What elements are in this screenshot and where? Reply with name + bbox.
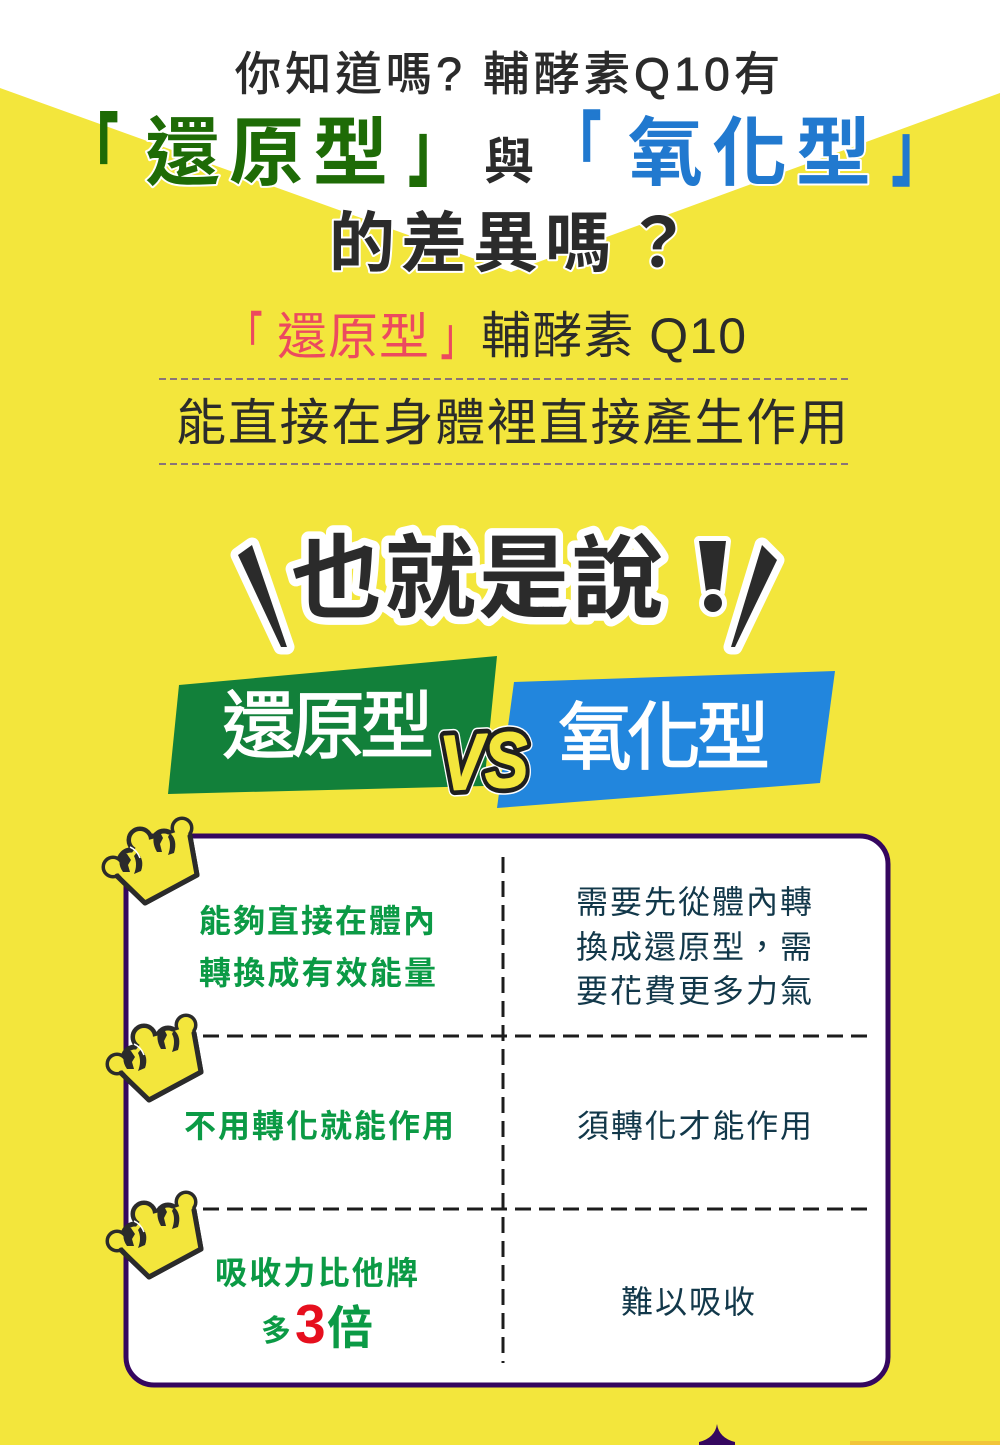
row 3 left xyxy=(215,1255,418,1355)
banner: reduced type xyxy=(168,656,497,794)
heading: oxidized type: 「 xyxy=(554,107,601,194)
banner: oxidized type: 氧化型 xyxy=(558,696,770,779)
badge: VS: VS xyxy=(438,715,530,807)
heading: in other words xyxy=(238,529,777,647)
table dividers xyxy=(203,857,868,1363)
heading: reduced type xyxy=(71,108,456,196)
heading: reduced type: 」 xyxy=(409,108,456,195)
subtitle: reduced Q10: 」 xyxy=(441,309,471,365)
row 3 left: 多 xyxy=(261,1315,291,1348)
title: intro line: 你知道嗎? 輔酵素Q10有 xyxy=(235,48,780,100)
row 1 right: 要花費更多力氣 xyxy=(576,973,812,1009)
subtitle: reduced Q10: 輔酵素 Q10 xyxy=(481,308,746,364)
row 1 left: 能夠直接在體內 xyxy=(199,903,435,939)
icon: crown 2 xyxy=(108,1016,201,1100)
heading: oxidized type: 氧化型 xyxy=(628,111,871,195)
row 3 left: 吸收力比他牌 xyxy=(215,1255,418,1291)
badge: VS: VS xyxy=(438,715,530,807)
icon: crown 1 xyxy=(104,819,197,903)
row 3 right: 難以吸收 xyxy=(621,1284,755,1320)
heading: oxidized type: 」 xyxy=(892,108,939,195)
row 3 left: 3 xyxy=(295,1293,326,1355)
subtitle: reduced Q10: 還原型 xyxy=(277,309,429,365)
title: difference question: 的差異嗎 xyxy=(329,206,611,280)
row 2 left: 不用轉化就能作用 xyxy=(184,1108,454,1144)
subtitle: dashed callout: 能直接在身體裡直接產生作用 xyxy=(176,395,848,451)
subtitle: reduced Q10 xyxy=(232,308,746,365)
title: reduced vs oxidized line xyxy=(71,107,939,196)
row 1 left xyxy=(199,903,436,991)
decorative orange glow xyxy=(850,1441,1000,1445)
banner: oxidized type xyxy=(497,671,835,808)
heading: and: 與 xyxy=(484,134,534,190)
icon: sparkle xyxy=(699,1424,735,1445)
row 2 right: 須轉化才能作用 xyxy=(577,1108,812,1144)
panel: comparison table xyxy=(126,836,888,1385)
heading: reduced type: 還原型 xyxy=(145,111,388,195)
row 1 right: 需要先從體內轉 xyxy=(576,884,812,920)
row 1 right: 換成還原型，需 xyxy=(576,929,812,965)
heading text: 也就是說 xyxy=(291,529,663,630)
heading: reduced type: 「 xyxy=(71,109,118,196)
row 1 right xyxy=(576,884,812,1009)
title: difference question: ？ xyxy=(624,206,692,282)
icon: left exclamation stroke xyxy=(238,545,287,647)
icon: right exclamation stroke xyxy=(731,545,777,647)
row 1 left: 轉換成有效能量 xyxy=(199,955,436,991)
subtitle: reduced Q10: 「 xyxy=(232,309,262,365)
banner: reduced type: 還原型 xyxy=(222,685,434,768)
icon: exclamation mark xyxy=(699,541,726,612)
badge: VS: VS xyxy=(438,715,530,807)
heading: oxidized type xyxy=(554,107,939,195)
icon: crown 3 xyxy=(108,1193,201,1277)
row 3 left: 倍 xyxy=(327,1302,373,1354)
